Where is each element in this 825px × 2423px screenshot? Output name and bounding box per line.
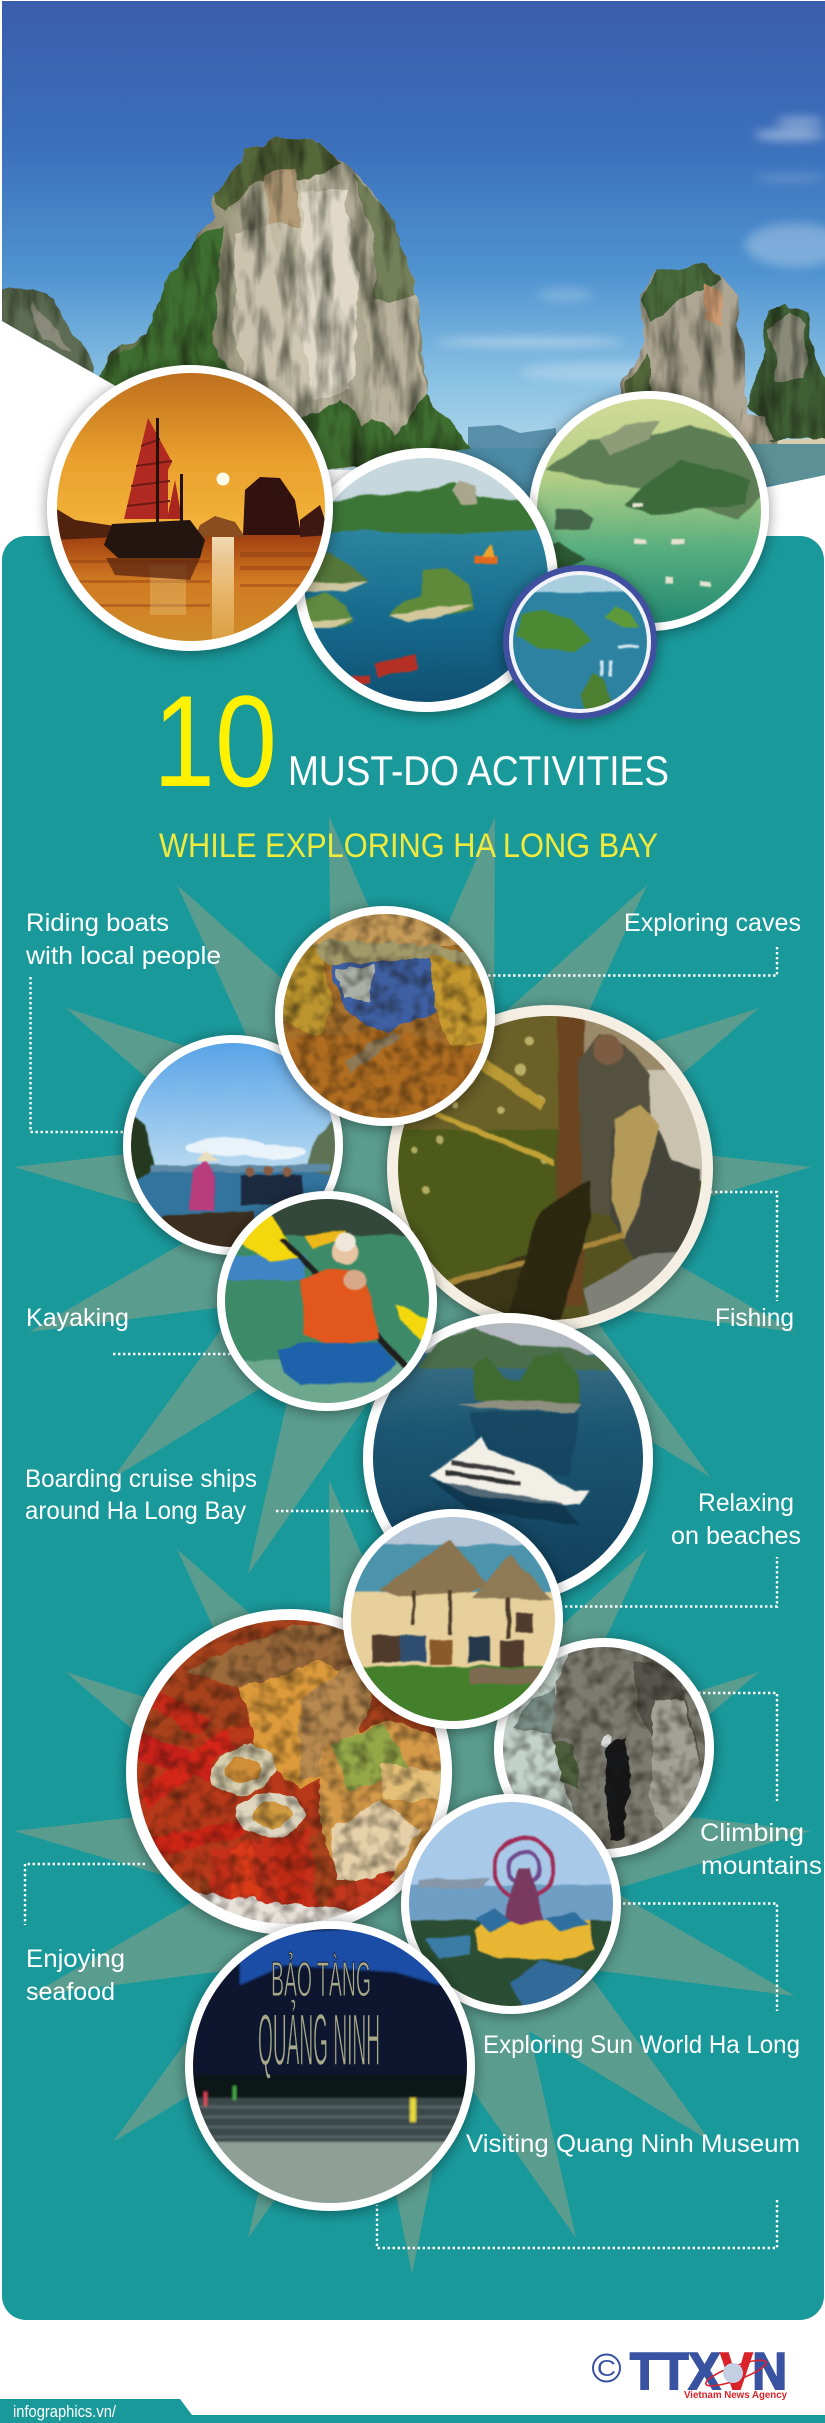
label: boarding cruise ships: around Ha Long Bay: [25, 1497, 246, 1525]
label: climbing mountains: mountains: [701, 1852, 822, 1880]
photo circle: small aerial view with blue ring: [503, 565, 657, 720]
label: relaxing on beaches: on beaches: [671, 1522, 801, 1550]
logo: TTXVN Vietnam News Agency: Vietnam News Agency: [684, 2389, 787, 2401]
photo circle: riding boats with local people: [115, 1030, 355, 1265]
label: fishing: Fishing: [715, 1304, 794, 1332]
photo circle: climbing mountains: [490, 1635, 720, 1865]
title: 10 must-do activities: 10: [153, 668, 277, 814]
photo circle: fishing at night: [385, 1000, 720, 1340]
footer bar with source tab: infographics.vn/: [13, 2402, 116, 2421]
label: climbing mountains: Climbing: [700, 1819, 804, 1847]
building sign text: [258, 1952, 380, 2081]
label: exploring caves: Exploring caves: [624, 909, 801, 937]
photo circle: exploring caves: [270, 900, 500, 1135]
photo circle: blue bay with islands: [290, 445, 570, 720]
starburst: upper decorative rays: [14, 816, 811, 1610]
label: enjoying seafood: Enjoying: [26, 1945, 125, 1973]
hero photo: karst islands against blue sky: [0, 0, 825, 508]
label: riding boats: with local people: [25, 942, 221, 970]
dotted connector lines: [25, 947, 777, 2248]
photo circle: cruise ship: [355, 1308, 665, 1610]
label: enjoying seafood: seafood: [26, 1978, 115, 2006]
footer bar with source tab: [0, 2399, 825, 2423]
subtitle: WHILE EXPLORING HA LONG BAY: [159, 827, 658, 865]
photo circle: Quang Ninh Museum at night: [185, 1920, 480, 2220]
title: 10 must-do activities: MUST-DO ACTIVITIES: [288, 747, 669, 794]
photo circle: Sun World Ha Long: [395, 1790, 630, 2025]
starburst: lower decorative rays: [14, 1480, 811, 2274]
label: riding boats: Riding boats: [26, 909, 169, 937]
photo circle: Quang Ninh Museum at night: BẢO TÀNG: [271, 1952, 371, 2007]
photo circle: relaxing on beaches: [335, 1505, 575, 1741]
label: exploring Sun World: Exploring Sun World Ha Long: [483, 2031, 800, 2059]
label: visiting museum: Visiting Quang Ninh Museum: [466, 2130, 800, 2158]
title: 10 must-do activities: [153, 668, 669, 814]
label: boarding cruise ships: Boarding cruise ships: [25, 1465, 257, 1493]
panel: teal main background: [2, 536, 824, 2320]
text: QUẢNG NINH: [258, 2000, 380, 2081]
label: kayaking: Kayaking: [26, 1304, 129, 1332]
label: relaxing on beaches: Relaxing: [698, 1489, 794, 1517]
photo circle: enjoying seafood: [120, 1605, 460, 1945]
logo: TTXVN Vietnam News Agency: TTXVN: [630, 2343, 787, 2401]
logo: TTXVN Vietnam News Agency: C: [597, 2355, 616, 2381]
photo circle: green bay at dawn: [520, 385, 780, 640]
photo circle: junk boat at sunset: [47, 365, 335, 651]
activity labels: [25, 909, 822, 2158]
photo circle: kayaking: [210, 1185, 445, 1420]
